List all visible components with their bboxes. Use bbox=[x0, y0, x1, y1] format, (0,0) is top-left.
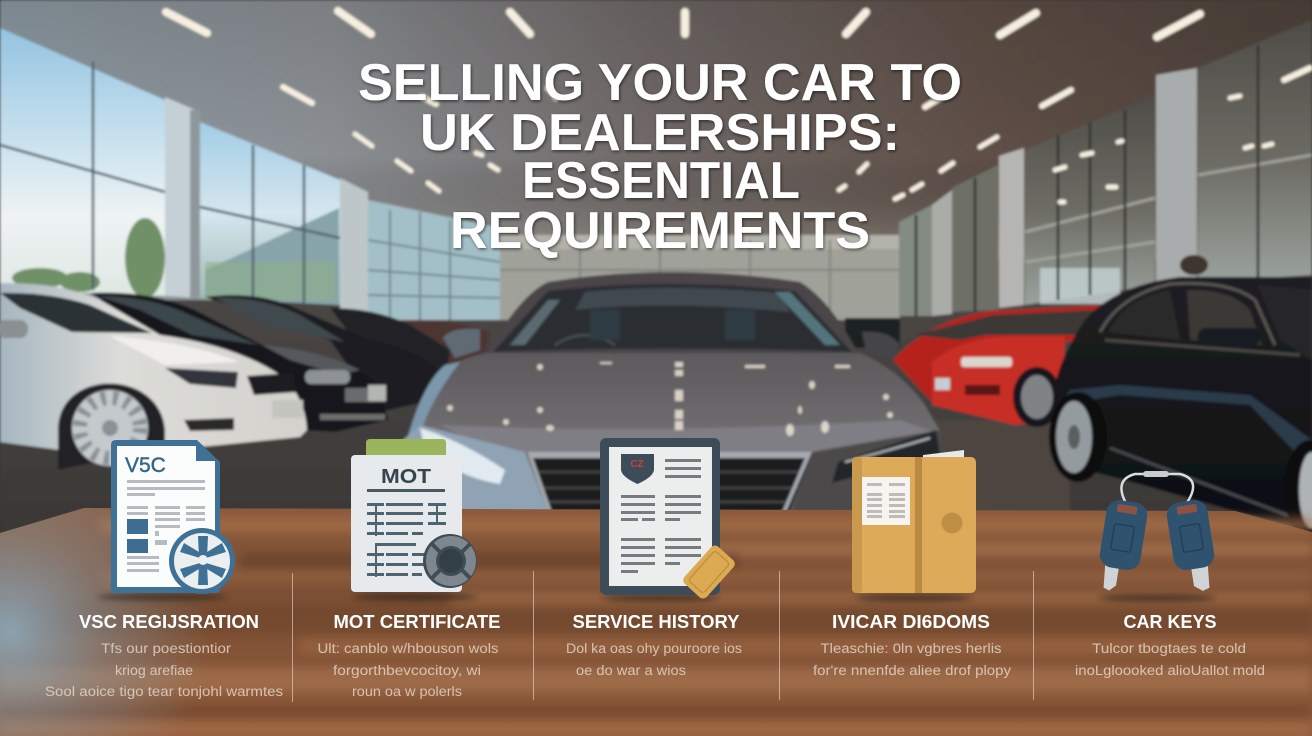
column: MOT certificate: MOT CERTIFICATE bbox=[334, 612, 500, 632]
icon: V5C registration document: V5C bbox=[125, 454, 166, 477]
showroom background bbox=[0, 0, 1312, 540]
icon: folder of documents bbox=[852, 450, 976, 602]
column: vehicle documents: IVICAR DI6DOMS bbox=[832, 612, 990, 632]
title: ESSENTIAL bbox=[522, 152, 800, 210]
column: MOT certificate: roun oa w polerls bbox=[352, 684, 462, 699]
car: red right bbox=[845, 305, 1108, 427]
column: V5C registration: Sool aoice tigo tear tonjohl warmtes bbox=[45, 684, 283, 699]
wheel badge bbox=[423, 534, 477, 588]
column: service history: Dol ka oas ohy pouroore ios bbox=[566, 641, 742, 656]
car: white left bbox=[0, 283, 307, 470]
column: V5C registration bbox=[45, 612, 283, 699]
column: MOT certificate bbox=[318, 612, 500, 699]
column: vehicle documents: Tleaschie: 0ln vgbres herlis bbox=[820, 641, 1002, 656]
wheel badge bbox=[169, 528, 235, 594]
car: black right bbox=[1049, 277, 1312, 540]
title: REQUIREMENTS bbox=[450, 202, 870, 260]
icon: service history document: CZ bbox=[630, 459, 644, 470]
column: MOT certificate: Ult: canblo w/hbouson wols bbox=[318, 641, 499, 656]
left windows bbox=[0, 28, 500, 320]
car: centre grey bbox=[401, 272, 942, 515]
title: UK DEALERSHIPS: bbox=[420, 104, 900, 162]
left key bbox=[1094, 498, 1149, 595]
title: SELLING YOUR CAR TO bbox=[358, 54, 962, 112]
column: service history bbox=[566, 612, 742, 678]
column: MOT certificate: forgorthbevcocitoy, wi bbox=[333, 663, 481, 678]
column: V5C registration: Tfs our poestiontior bbox=[101, 641, 232, 656]
column: V5C registration: VSC REGIJSRATION bbox=[79, 612, 259, 632]
column: V5C registration: kriog arefiae bbox=[115, 663, 193, 678]
column: car keys: CAR KEYS bbox=[1124, 612, 1216, 632]
column: service history: oe do war a wios bbox=[576, 663, 686, 678]
icon: MOT certificate: MOT bbox=[381, 466, 431, 488]
column: vehicle documents: for're nnenfde aliee drof plopy bbox=[813, 663, 1011, 678]
wood grain bbox=[0, 518, 1312, 736]
column: car keys bbox=[1075, 612, 1265, 678]
icon: V5C registration document bbox=[97, 440, 235, 601]
car: dark cars left bbox=[90, 293, 490, 432]
column: service history: SERVICE HISTORY bbox=[572, 612, 740, 632]
icon: MOT certificate bbox=[351, 439, 477, 601]
column dividers bbox=[292, 571, 1034, 702]
back wall bbox=[500, 235, 900, 320]
folder label bbox=[862, 477, 910, 525]
column: vehicle documents bbox=[813, 612, 1011, 678]
tag bbox=[681, 543, 737, 601]
person behind car bbox=[1180, 255, 1208, 275]
column: car keys: Tulcor tbogtaes te cold bbox=[1092, 641, 1246, 656]
title bbox=[358, 54, 962, 260]
right key bbox=[1165, 498, 1220, 595]
right windows bbox=[899, 20, 1312, 316]
wooden table bbox=[0, 508, 1312, 736]
ceiling lights bbox=[166, 11, 1310, 202]
icon: service history document bbox=[600, 438, 737, 602]
column: car keys: inoLgloooked alioUallot mold bbox=[1075, 663, 1265, 678]
icon: car keys bbox=[1094, 471, 1220, 602]
